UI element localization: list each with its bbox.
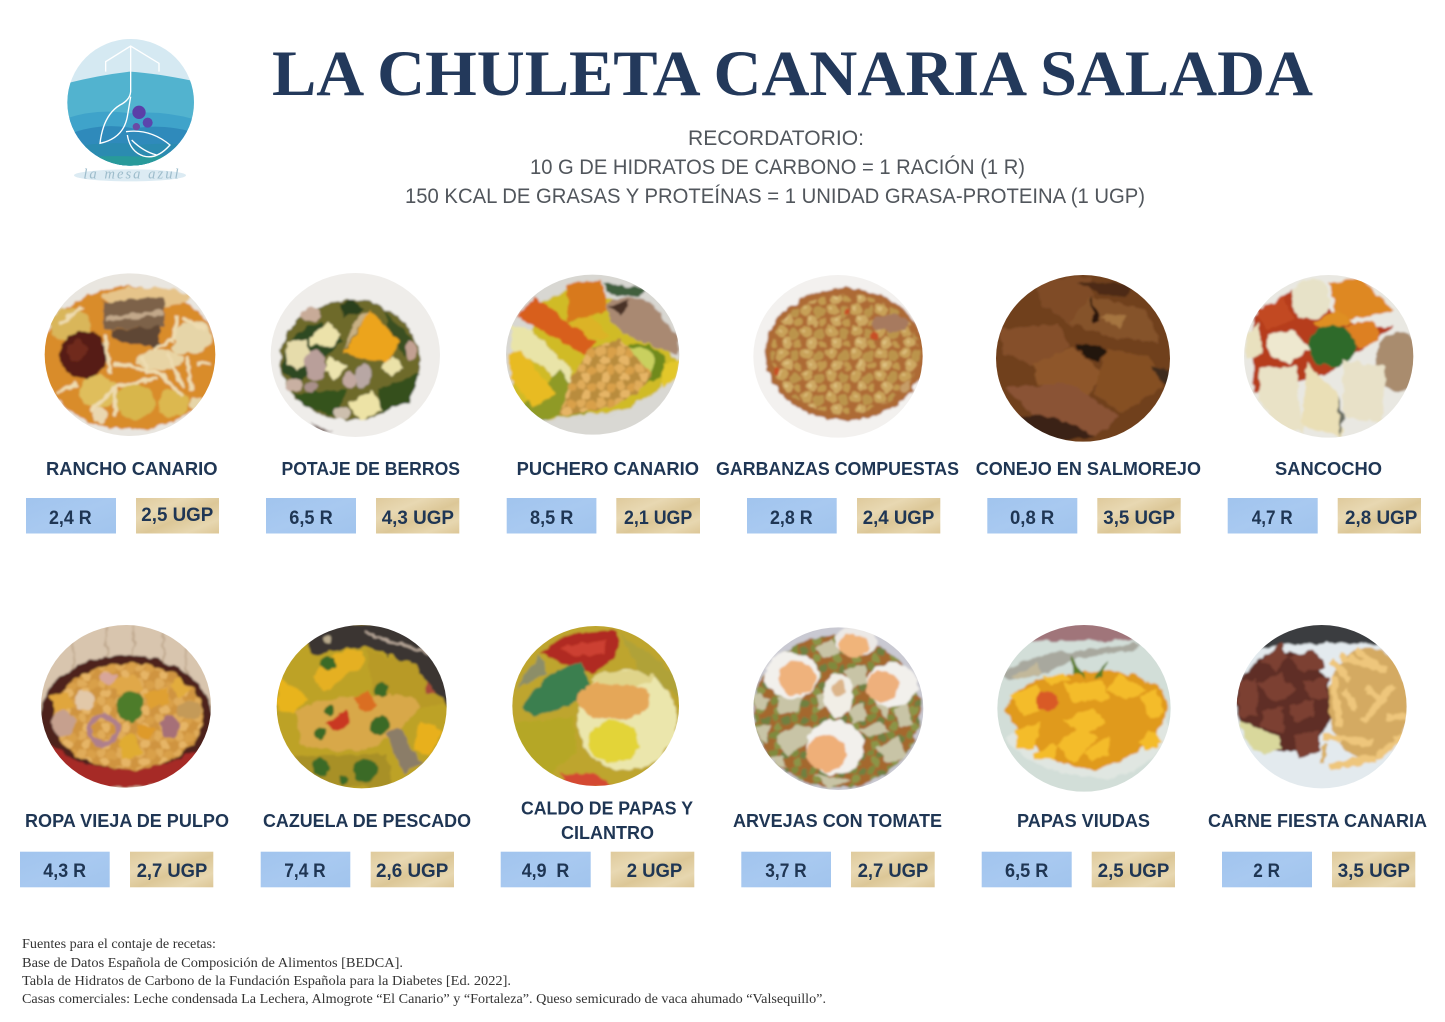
panel: rancho canario	[26, 260, 227, 534]
badge: UGP: 3,5 UGP	[1338, 861, 1410, 882]
photo: cazuela de pescado	[276, 625, 447, 788]
name: CARNE FIESTA CANARIA	[1208, 811, 1427, 831]
name: ROPA VIEJA DE PULPO	[25, 811, 229, 831]
badge: UGP: 2,8 UGP	[1345, 508, 1418, 529]
badge: raciones: 4,7 R	[1252, 508, 1293, 529]
badge: raciones: 2 R	[1253, 861, 1280, 882]
photo: papas viudas	[997, 625, 1171, 792]
logo: la mesa azul: la mesa azul	[83, 167, 181, 183]
badge: raciones	[20, 852, 110, 887]
badge: raciones: 4,3 R	[43, 861, 86, 882]
photo: ropa vieja de pulpo	[41, 625, 211, 788]
name: RANCHO CANARIO	[46, 459, 218, 479]
badge: raciones	[501, 852, 591, 887]
photo: sancocho	[1244, 275, 1414, 438]
badge: raciones: 8,5 R	[530, 508, 574, 529]
badge: raciones: 2,8 R	[770, 508, 813, 529]
name: POTAJE DE BERROS	[282, 459, 460, 479]
panel: cazuela de pescado	[261, 610, 471, 887]
badge: UGP	[1097, 498, 1181, 534]
logo: la mesa azul	[67, 38, 197, 183]
badge: UGP	[611, 852, 694, 887]
badge: raciones	[507, 498, 596, 534]
panel: conejo en salmorejo	[976, 260, 1201, 534]
panel: ropa vieja de pulpo	[20, 610, 229, 887]
panel: potaje de berros	[260, 260, 460, 534]
sources footer: Fuentes para el contaje de recetas:	[22, 937, 216, 952]
badge: raciones: 0,8 R	[1010, 508, 1055, 529]
badge: UGP: 2,4 UGP	[863, 508, 935, 529]
badge: UGP: 4,3 UGP	[382, 508, 454, 529]
badge: raciones	[987, 498, 1077, 534]
sources footer: Casas comerciales: Leche condensada La Lechera, Almogrote “El Canario” y “Fortaleza”. Queso semicurado de vaca ahumado “Valsequillo”.	[22, 992, 826, 1007]
panel: carne fiesta canaria	[1208, 610, 1427, 887]
badge: UGP: 2,5 UGP	[1098, 861, 1170, 882]
title: LA CHULETA CANARIA SALADA	[272, 38, 1313, 110]
photo: puchero canario	[506, 274, 680, 435]
photo: garbanzas compuestas	[754, 275, 923, 438]
badge: raciones: 2,4 R	[49, 508, 92, 529]
badge: UGP	[130, 852, 213, 887]
sources footer: Base de Datos Española de Composición de Alimentos [BEDCA].	[22, 956, 403, 971]
badge: raciones	[747, 498, 837, 534]
name: PUCHERO CANARIO	[517, 459, 699, 479]
badge: raciones	[741, 852, 831, 887]
badge: UGP	[136, 498, 219, 534]
badge: UGP: 2,7 UGP	[137, 861, 208, 882]
panel: sancocho	[1228, 260, 1427, 534]
name	[521, 798, 693, 843]
name: PAPAS VIUDAS	[1017, 811, 1150, 831]
badge: UGP	[371, 852, 454, 887]
badge: UGP: 2,6 UGP	[376, 861, 449, 882]
name: SANCOCHO	[1275, 459, 1382, 479]
badge: UGP	[376, 498, 459, 534]
reminder text block	[405, 127, 1145, 208]
reminder text block: 10 G DE HIDRATOS DE CARBONO = 1 RACIÓN (1 R)	[530, 156, 1025, 179]
badge: UGP: 2,7 UGP	[858, 861, 929, 882]
badge: raciones: 6,5 R	[1005, 861, 1049, 882]
photo: carne fiesta canaria	[1236, 625, 1407, 788]
badge: raciones: 4,9 R	[522, 861, 570, 882]
name: CAZUELA DE PESCADO	[263, 811, 471, 831]
badge: raciones	[266, 498, 356, 534]
badge: UGP: 3,5 UGP	[1103, 508, 1175, 529]
panel: puchero canario	[506, 274, 700, 534]
badge: raciones	[982, 852, 1072, 887]
badge: raciones	[26, 498, 116, 534]
badge: UGP	[1092, 852, 1175, 887]
name: CILANTRO	[561, 823, 654, 843]
badge: raciones	[261, 852, 350, 887]
photo: rancho canario	[44, 274, 216, 436]
panel: caldo de papas y cilantro	[500, 610, 694, 887]
badge: raciones: 3,7 R	[765, 861, 807, 882]
sources footer	[22, 937, 826, 1007]
panel: arvejas con tomate	[733, 613, 942, 887]
badge: UGP: 2,1 UGP	[624, 508, 693, 529]
name: CONEJO EN SALMOREJO	[976, 459, 1201, 479]
badge: raciones	[1228, 498, 1318, 534]
panel: garbanzas compuestas	[716, 260, 959, 534]
reminder text block: 150 KCAL DE GRASAS Y PROTEÍNAS = 1 UNIDAD GRASA-PROTEINA (1 UGP)	[405, 185, 1145, 208]
sources footer: Tabla de Hidratos de Carbono de la Fundación Española para la Diabetes [Ed. 2022].	[22, 974, 511, 989]
badge: UGP	[1332, 852, 1415, 887]
badge: UGP: 2,5 UGP	[141, 505, 214, 526]
badge: UGP	[616, 498, 700, 534]
name: GARBANZAS COMPUESTAS	[716, 459, 959, 479]
name: CALDO DE PAPAS Y	[521, 798, 693, 818]
badge: UGP: 2 UGP	[627, 861, 683, 882]
badge: raciones: 7,4 R	[284, 861, 326, 882]
badge: UGP	[1338, 498, 1421, 534]
photo: potaje de berros	[270, 273, 440, 437]
badge: UGP	[857, 498, 940, 534]
name: ARVEJAS CON TOMATE	[733, 811, 942, 831]
badge: raciones	[1222, 852, 1312, 887]
photo: conejo en salmorejo	[996, 275, 1170, 442]
badge: UGP	[851, 852, 935, 887]
photo: caldo de papas y cilantro	[512, 626, 679, 786]
photo: arvejas con tomate	[753, 627, 924, 790]
badge: raciones: 6,5 R	[289, 508, 333, 529]
reminder text block: RECORDATORIO:	[688, 127, 864, 150]
panel: papas viudas	[982, 610, 1183, 887]
